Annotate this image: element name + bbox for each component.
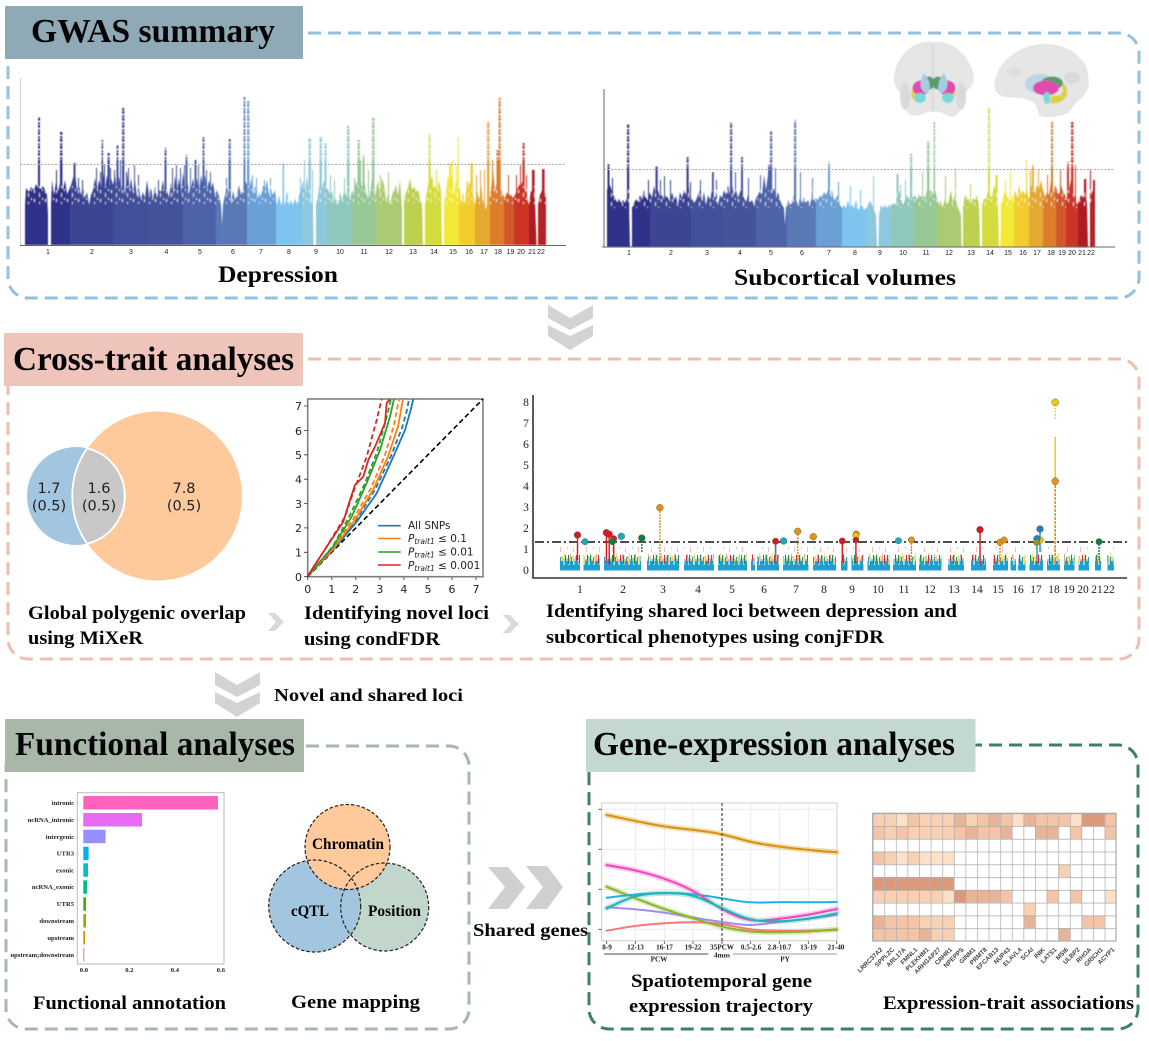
chart: depression Manhattan plot: 8 <box>287 249 291 256</box>
chart: conjFDR Manhattan plot: 22 <box>1103 584 1115 596</box>
chart: condFDR QQ plot: 2 <box>295 522 302 535</box>
chart: subcortical volumes Manhattan plot: 15 <box>1004 250 1012 257</box>
panel: Gene-expression analyses <box>586 719 1138 1029</box>
legend: QQ plot: ≤ 0.01 <box>435 546 474 558</box>
chart: functional annotation bar chart: upstream;downstream <box>10 952 75 959</box>
chart: expression-trait association heatmap: NPEPPS <box>943 946 966 969</box>
chart: conjFDR Manhattan plot: 12 <box>924 584 936 596</box>
chart: functional annotation bar chart: intronic <box>52 800 74 807</box>
chart: depression Manhattan plot: 17 <box>480 249 488 256</box>
chart: conjFDR Manhattan plot: 3 <box>523 502 529 514</box>
chart: depression Manhattan plot: 4 <box>165 249 169 256</box>
chart: expression-trait association heatmap: INIK <box>1033 946 1047 960</box>
chart: depression Manhattan plot: 12 <box>385 249 393 256</box>
chart: depression Manhattan plot: 19 <box>507 249 514 256</box>
caption: Global polygenic overlap: Global polygenic overlap <box>28 603 246 624</box>
chart: subcortical volumes Manhattan plot: 8 <box>853 250 857 257</box>
chart: conjFDR Manhattan plot: 4 <box>695 584 701 596</box>
chart: condFDR QQ plot: 1 <box>328 583 335 596</box>
arrow: chevron to conjFDR <box>503 615 519 633</box>
chart: depression Manhattan plot: 22 <box>537 249 545 256</box>
chart: depression Manhattan plot: 9 <box>314 249 318 256</box>
chart: expression-trait association heatmap: MSI6 <box>1055 946 1070 962</box>
chart: functional annotation bar chart: exonic <box>56 868 74 874</box>
chart: depression Manhattan plot: 13 <box>409 249 417 256</box>
caption: Identifying novel loci <box>304 603 489 650</box>
chart: condFDR QQ plot: 4 <box>295 474 302 486</box>
chart: subcortical volumes Manhattan plot: 14 <box>986 250 994 257</box>
chart: spatiotemporal expression trajectory: 2.8-10.7 <box>768 944 792 952</box>
chart: conjFDR Manhattan plot: 3 <box>660 584 666 596</box>
chart: condFDR QQ plot: 5 <box>424 583 432 596</box>
chart: functional annotation bar chart: UTR5 <box>57 901 75 908</box>
chart: subcortical volumes Manhattan plot: 6 <box>800 250 804 257</box>
chart: expression-trait association heatmap: ACYP1 <box>1097 946 1117 966</box>
chart: condFDR QQ plot: 3 <box>295 498 302 511</box>
chart: expression-trait association heatmap: GINM1 <box>958 946 978 966</box>
chart: subcortical volumes Manhattan plot: 20 <box>1068 250 1076 257</box>
chart: spatiotemporal expression trajectory: PCW <box>651 956 668 964</box>
arrow: chevrons down from GWAS to cross-trait <box>548 305 593 350</box>
chart: subcortical volumes Manhattan plot: 21 <box>1078 250 1086 257</box>
chart: subcortical volumes Manhattan plot: 22 <box>1087 250 1095 257</box>
legend: QQ plot: trait1 <box>414 550 435 560</box>
chart: spatiotemporal expression trajectory: 0.5-2.6 <box>741 944 762 952</box>
chart: subcortical volumes Manhattan plot: 16 <box>1019 250 1027 257</box>
chart: MiXeR Venn diagram <box>27 412 242 580</box>
chart: condFDR QQ plot: 6 <box>448 583 456 596</box>
caption: Subcortical volumes: Subcortical volumes <box>734 265 956 290</box>
chart: condFDR QQ plot: 2 <box>352 583 359 596</box>
chart: conjFDR Manhattan plot: 7 <box>523 418 529 430</box>
chart: depression Manhattan plot: 3 <box>129 249 133 256</box>
heading background: Functional analyses <box>5 719 304 772</box>
chart: functional annotation bar chart: intergenic <box>46 834 74 841</box>
chart: conjFDR Manhattan plot: 20 <box>1077 584 1089 596</box>
chart: subcortical volumes Manhattan plot: 13 <box>967 250 975 257</box>
caption: Gene mapping: Gene mapping <box>291 992 421 1013</box>
chart: conjFDR Manhattan plot: 11 <box>898 584 910 596</box>
chart: condFDR QQ plot: 7 <box>295 400 302 413</box>
chart: expression-trait association heatmap: ELAVL4 <box>1002 946 1024 968</box>
chart: condFDR QQ plot <box>295 399 483 596</box>
chart: spatiotemporal expression trajectory: 19-22 <box>685 944 702 952</box>
caption: Identifying shared loci <box>546 601 957 648</box>
chart: spatiotemporal expression trajectory: 35PCW <box>710 944 735 952</box>
chart: depression Manhattan plot <box>20 78 566 256</box>
chart: conjFDR Manhattan plot: 9 <box>849 584 855 596</box>
heading: Functional analyses: Functional analyses <box>15 726 295 763</box>
chart: conjFDR Manhattan plot: 21 <box>1091 584 1103 596</box>
chart: depression Manhattan plot: 6 <box>231 249 235 256</box>
chart: subcortical volumes Manhattan plot: 11 <box>922 250 930 257</box>
chart: conjFDR Manhattan plot: 16 <box>1012 584 1024 596</box>
chart: conjFDR Manhattan plot: 6 <box>761 584 767 596</box>
axes <box>533 395 1127 578</box>
heading background: Gene-expression analyses <box>586 719 976 772</box>
label: Shared genes: Shared genes <box>473 920 588 940</box>
arrow: chevron to condFDR <box>268 613 284 631</box>
chart: expression-trait association heatmap: ARHGAP27 <box>913 946 943 976</box>
chart: expression-trait association heatmap: NUP43 <box>993 946 1012 966</box>
heading: GWAS summary: GWAS summary <box>31 13 275 50</box>
chart: MiXeR Venn diagram: (0.5) <box>32 498 66 514</box>
chart: expression-trait association heatmap: ULBP2 <box>1062 946 1082 966</box>
chart: subcortical volumes Manhattan plot: 10 <box>899 250 907 257</box>
chart: expression-trait association heatmap <box>856 813 1117 976</box>
chart: spatiotemporal expression trajectory: 8-9 <box>602 944 612 952</box>
chart: conjFDR Manhattan plot: 17 <box>1030 584 1042 596</box>
legend: QQ plot: trait1 <box>414 564 435 573</box>
legend: QQ plot: trait1 <box>414 537 435 546</box>
chart: conjFDR Manhattan plot: 10 <box>872 584 884 596</box>
legend: QQ plot: ≤ 0.001 <box>435 560 480 572</box>
chart: subcortical volumes Manhattan plot: 7 <box>827 250 831 257</box>
chart: expression-trait association heatmap: SCAI <box>1020 946 1035 962</box>
chart: spatiotemporal expression trajectory: 21-40 <box>828 944 845 952</box>
chart: subcortical volumes Manhattan plot: 4 <box>738 250 742 257</box>
icon: brain front view <box>895 43 973 116</box>
chart: subcortical volumes Manhattan plot: 12 <box>945 250 953 257</box>
chart: expression-trait association heatmap: FMNL1 <box>899 946 920 966</box>
caption: Spatiotemporal gene expression trajectory <box>629 971 814 1017</box>
chart: depression Manhattan plot: 18 <box>494 249 502 256</box>
chart: spatiotemporal expression trajectory <box>598 803 845 964</box>
legend: QQ plot: All SNPs <box>408 520 450 532</box>
chart: conjFDR Manhattan plot: 8 <box>523 397 529 409</box>
chart: conjFDR Manhattan plot: 14 <box>971 584 983 596</box>
chart: spatiotemporal expression trajectory: 12-13 <box>627 944 644 952</box>
chart: conjFDR Manhattan plot: 2 <box>523 523 529 535</box>
legend: QQ plot: P <box>408 533 415 545</box>
chart: expression-trait association heatmap: EFCAB13 <box>975 946 1001 972</box>
legend: QQ plot: P <box>408 560 415 572</box>
chart: condFDR QQ plot: 7 <box>472 583 480 596</box>
heading background: Cross-trait analyses <box>4 333 303 386</box>
legend: QQ plot <box>378 520 480 573</box>
chart: functional annotation bar chart: 0.6 <box>217 967 226 974</box>
chart: depression Manhattan plot: 15 <box>449 249 457 256</box>
chart: expression-trait association heatmap: PRMT8 <box>969 946 989 967</box>
legend: QQ plot: P <box>408 546 415 558</box>
legend: QQ plot: ≤ 0.1 <box>435 533 467 545</box>
chart: MiXeR Venn diagram: 1.7 <box>37 481 61 497</box>
chart: condFDR QQ plot: 4 <box>400 583 407 596</box>
chart: condFDR QQ plot: 6 <box>295 425 302 438</box>
chart: expression-trait association heatmap: PLEKHM1 <box>905 946 931 973</box>
chart: conjFDR Manhattan plot: 19 <box>1063 584 1075 596</box>
caption: Spatiotemporal gene expression trajectory: Spatiotemporal gene <box>631 971 812 992</box>
chart: conjFDR Manhattan plot: 7 <box>793 584 799 596</box>
icon: brain side view <box>995 45 1088 116</box>
chart: gene mapping Venn diagram: Chromatin <box>312 836 384 853</box>
chart: functional annotation bar chart: 0.0 <box>80 967 89 974</box>
chart: functional annotation bar chart <box>10 793 226 974</box>
chart: gene mapping Venn diagram: cQTL <box>291 903 329 920</box>
chart: depression Manhattan plot: 14 <box>430 249 438 256</box>
chart: conjFDR Manhattan plot: 2 <box>620 584 626 596</box>
chart: subcortical volumes Manhattan plot: 17 <box>1033 250 1041 257</box>
caption: Expression-trait associations: Expression-trait associations <box>883 993 1134 1014</box>
chart: condFDR QQ plot: 1 <box>295 546 302 560</box>
chart: subcortical volumes Manhattan plot: 5 <box>769 250 773 257</box>
chart: conjFDR Manhattan plot: 1 <box>523 544 529 556</box>
chart: conjFDR Manhattan plot: 6 <box>523 439 529 451</box>
chart: depression Manhattan plot: 21 <box>528 249 536 256</box>
heading background: GWAS summary <box>5 6 303 59</box>
chart: depression Manhattan plot: 10 <box>336 249 344 256</box>
caption: Identifying shared loci: subcortical phenotypes using conjFDR <box>546 627 884 648</box>
arrow: chevrons down to functional analyses <box>215 672 260 717</box>
chart: MiXeR Venn diagram: 1.6 <box>87 481 111 497</box>
chart: spatiotemporal expression trajectory: PY <box>780 956 791 964</box>
chart: gene mapping Venn diagram <box>269 804 429 952</box>
chart: expression-trait association heatmap: ARL17A <box>885 946 908 969</box>
chart: expression-trait association heatmap: CRHR1 <box>934 946 954 967</box>
chart: condFDR QQ plot: 3 <box>376 583 383 596</box>
chart: subcortical volumes Manhattan plot: 2 <box>669 250 673 257</box>
chart: conjFDR Manhattan plot: 15 <box>992 584 1004 596</box>
chart: expression-trait association heatmap: SPPL2C <box>874 946 896 969</box>
chart: functional annotation bar chart: upstream <box>47 935 75 942</box>
chart: expression-trait association heatmap: RHOA <box>1075 946 1094 965</box>
chart: conjFDR Manhattan plot: 0 <box>523 565 529 577</box>
chart: functional annotation bar chart: downstream <box>39 918 74 925</box>
chart: subcortical volumes Manhattan plot: 1 <box>627 250 631 257</box>
chart: gene mapping Venn diagram: Position <box>368 903 421 920</box>
caption: Identifying shared loci: Identifying shared loci between depression and <box>546 601 957 622</box>
chart: expression-trait association heatmap: GRICH1 <box>1083 946 1105 968</box>
chart: conjFDR Manhattan plot: 13 <box>948 584 960 596</box>
heading: Gene-expression analyses: Gene-expression analyses <box>593 726 955 763</box>
arrow: double chevrons to gene-expression <box>488 866 563 909</box>
chart: depression Manhattan plot: 7 <box>259 249 263 256</box>
caption: Global polygenic overlap: using MiXeR <box>28 628 143 649</box>
chart: subcortical volumes Manhattan plot <box>602 89 1115 257</box>
chart: conjFDR Manhattan plot: 18 <box>1048 584 1060 596</box>
chart: functional annotation bar chart: ncRNA_intronic <box>28 817 74 824</box>
caption: Global polygenic overlap <box>28 603 246 649</box>
caption: Identifying novel loci: using condFDR <box>304 629 440 650</box>
chart: depression Manhattan plot: 1 <box>46 249 50 256</box>
chart: depression Manhattan plot: 2 <box>90 249 94 256</box>
chart: functional annotation bar chart: 0.2 <box>125 967 134 974</box>
chart: functional annotation bar chart: ncRNA_exonic <box>32 884 74 891</box>
chart: expression-trait association heatmap: LRRC37A2 <box>856 946 885 974</box>
chart: subcortical volumes Manhattan plot: 19 <box>1058 250 1066 257</box>
chart: condFDR QQ plot: 0 <box>304 583 311 596</box>
chart: spatiotemporal expression trajectory: 4mos <box>714 952 730 960</box>
chart: depression Manhattan plot: 11 <box>360 249 368 256</box>
chart: conjFDR Manhattan plot: 8 <box>821 584 827 596</box>
chart: spatiotemporal expression trajectory: 13-19 <box>800 944 817 952</box>
label: Novel and shared loci: Novel and shared loci <box>274 685 463 705</box>
chart: condFDR QQ plot: 5 <box>295 449 302 462</box>
chart: conjFDR Manhattan plot: 4 <box>523 481 529 493</box>
chart: subcortical volumes Manhattan plot: 9 <box>878 250 882 257</box>
chart: conjFDR Manhattan plot: 1 <box>577 584 583 596</box>
caption: Functional annotation: Functional annotation <box>33 993 226 1014</box>
chart: depression Manhattan plot: 16 <box>465 249 473 256</box>
chart: depression Manhattan plot: 20 <box>517 249 525 256</box>
caption: Spatiotemporal gene expression trajectory: expression trajectory <box>629 996 814 1017</box>
chart: functional annotation bar chart: UTR3 <box>57 850 75 858</box>
chart: depression Manhattan plot: 5 <box>198 249 202 256</box>
chart: functional annotation bar chart: 0.4 <box>171 967 180 974</box>
chart: expression-trait association heatmap: LATS1 <box>1040 946 1059 965</box>
caption: Depression: Depression <box>218 262 338 287</box>
caption: Identifying novel loci: Identifying novel loci <box>304 603 489 624</box>
chart: MiXeR Venn diagram: (0.5) <box>167 498 201 514</box>
panel: GWAS summary <box>5 6 1139 298</box>
panel: Functional analyses <box>5 719 469 1029</box>
chart: MiXeR Venn diagram: (0.5) <box>82 498 116 514</box>
panel: Cross-trait analyses <box>4 333 1139 659</box>
chart: MiXeR Venn diagram: 7.8 <box>172 481 196 497</box>
chart: subcortical volumes Manhattan plot: 18 <box>1047 250 1055 257</box>
chart: condFDR QQ plot: 0 <box>295 571 302 584</box>
chart: subcortical volumes Manhattan plot: 3 <box>705 250 709 257</box>
chart: conjFDR Manhattan plot: 5 <box>523 460 529 472</box>
heading: Cross-trait analyses: Cross-trait analyses <box>13 341 294 378</box>
chart: spatiotemporal expression trajectory: 16-17 <box>656 944 673 952</box>
chart: conjFDR Manhattan plot: 5 <box>729 584 735 596</box>
chart: conjFDR Manhattan plot <box>523 395 1128 596</box>
